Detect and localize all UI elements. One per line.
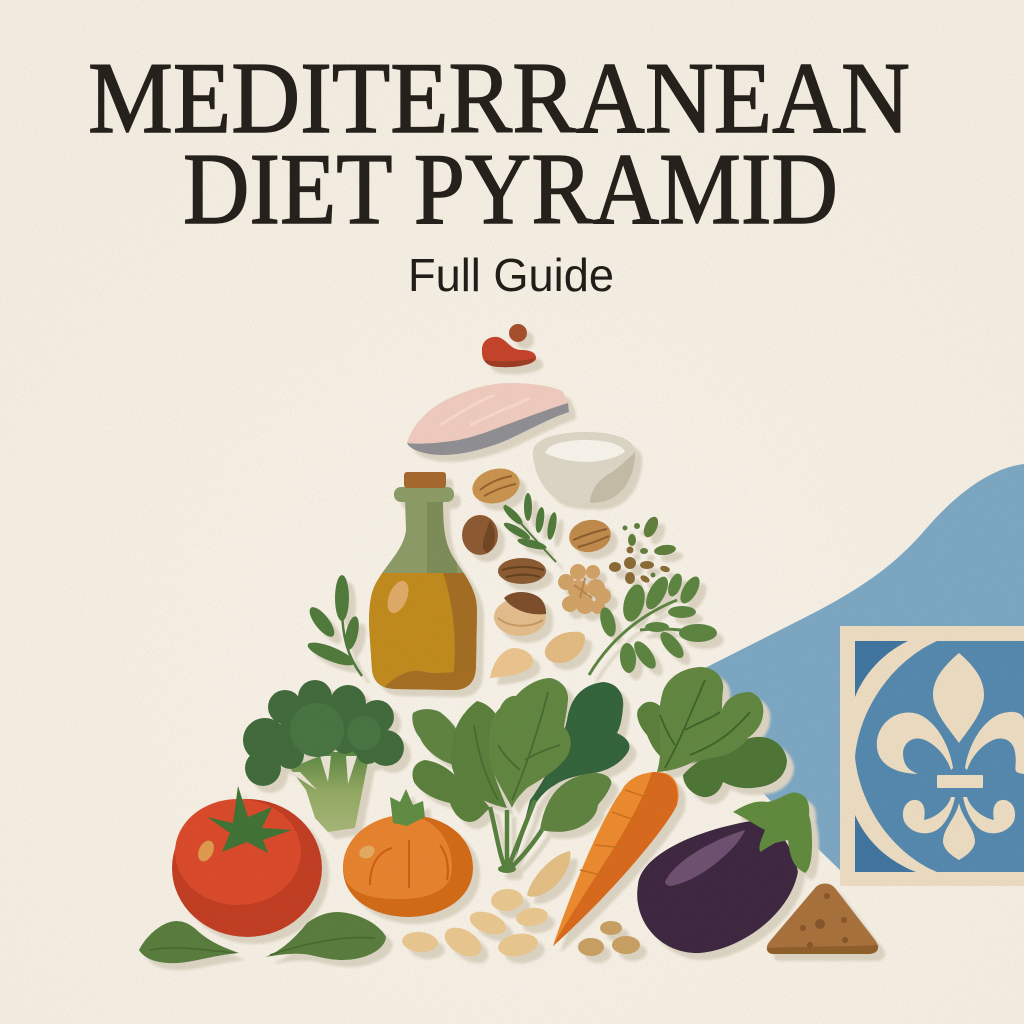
lower right leaf — [540, 773, 611, 832]
spinach veins — [474, 692, 560, 800]
fleur-de-lis — [877, 653, 1024, 860]
dark back leaf — [515, 682, 630, 860]
pyramid top: red meat — [482, 324, 536, 367]
bread wedge — [767, 884, 878, 954]
carrot with greens — [553, 667, 787, 946]
spinach bunch — [412, 678, 630, 873]
carrot greens — [637, 667, 787, 797]
title line 1: MEDITERRANEAN — [88, 42, 910, 155]
white beans — [401, 851, 570, 962]
tile frame — [840, 626, 1024, 886]
walnut — [558, 564, 611, 614]
title — [88, 42, 910, 246]
brazil nut — [494, 592, 546, 636]
orange squash — [343, 789, 473, 917]
seed cluster — [609, 514, 677, 584]
tile blue field — [855, 641, 1024, 872]
blue wave backdrop — [705, 464, 1024, 872]
right spinach leaf — [265, 912, 386, 960]
left herb sprig — [305, 575, 362, 676]
title line 2: DIET PYRAMID — [183, 133, 838, 246]
almond top — [468, 463, 524, 509]
small herb sprig — [501, 493, 558, 562]
stems — [490, 800, 542, 871]
squash stem — [390, 789, 425, 826]
subtitle: Full Guide — [408, 249, 614, 301]
eggplant calyx — [733, 792, 812, 873]
yogurt bowl — [533, 432, 635, 503]
eggplant — [637, 792, 812, 953]
olive oil bottle — [360, 472, 485, 695]
dark almond — [498, 558, 546, 584]
pale almond right — [545, 632, 585, 663]
right herb sprig — [589, 572, 717, 675]
hazelnut — [462, 515, 498, 555]
pale almond left — [490, 648, 533, 678]
far left upper leaf — [412, 709, 458, 765]
main leaf — [489, 678, 571, 808]
almond right — [567, 517, 613, 555]
tomato calyx — [207, 786, 292, 853]
left spinach leaf — [139, 921, 239, 963]
second leaf — [451, 701, 507, 808]
food pyramid — [139, 324, 878, 963]
small legumes near carrot — [578, 921, 640, 956]
carrot root — [553, 772, 679, 946]
tomato — [172, 786, 322, 937]
broccoli — [243, 680, 404, 832]
fish fillet — [407, 383, 569, 455]
decorative tile with fleur-de-lis — [840, 626, 1024, 886]
far left lower leaf — [412, 760, 490, 822]
tile corners and arc band — [855, 641, 937, 872]
